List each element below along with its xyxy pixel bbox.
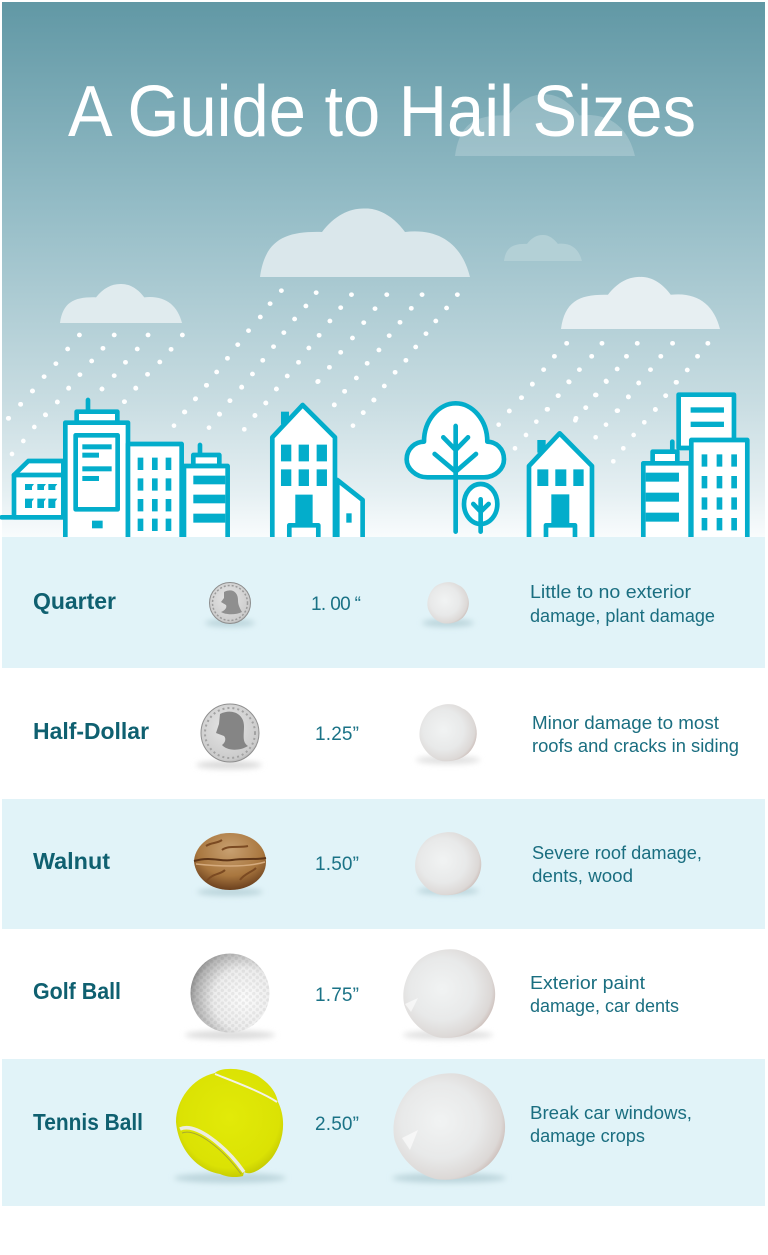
cloud: small far bbox=[504, 235, 582, 261]
icon: low office block bbox=[2, 461, 63, 517]
icon: walnut bbox=[194, 833, 266, 896]
label: Walnut: Walnut bbox=[33, 848, 110, 874]
value: 1.25 inch: 1.25” bbox=[315, 724, 359, 745]
cloud: faded behind title bbox=[455, 94, 635, 156]
label: Golf Ball: Golf Ball bbox=[33, 978, 121, 1004]
value: 2.50 inch: 2.50” bbox=[315, 1114, 359, 1135]
panel: row Walnut bbox=[2, 799, 765, 929]
description: walnut damage: dents, wood bbox=[532, 866, 633, 886]
illustration: left skyline bbox=[2, 400, 363, 543]
value: 1.50 inch: 1.50” bbox=[315, 854, 359, 875]
icon: walnut-size hailstone bbox=[415, 832, 481, 895]
hail dots: lower left field bbox=[6, 379, 376, 456]
hail dots: lower right field bbox=[496, 379, 678, 464]
description: golf ball damage bbox=[530, 973, 679, 1016]
icon: office cluster bbox=[643, 395, 747, 543]
value: 1.75 inch: 1.75” bbox=[315, 985, 359, 1006]
description: quarter damage bbox=[530, 582, 715, 626]
icon: golf-ball-size hailstone bbox=[403, 949, 495, 1040]
icon: townhouse with annex bbox=[272, 405, 363, 543]
panel: row Golf Ball bbox=[2, 929, 765, 1059]
description: quarter damage: damage, plant damage bbox=[530, 606, 715, 626]
icon: golf ball bbox=[185, 954, 275, 1040]
panel: row Half-Dollar bbox=[2, 668, 765, 799]
description: quarter damage: Little to no exterior bbox=[530, 582, 691, 602]
panel: sky background bbox=[2, 2, 765, 538]
icon: small tree bbox=[464, 484, 497, 532]
label: Tennis Ball: Tennis Ball bbox=[33, 1109, 143, 1135]
cloud: left bbox=[60, 284, 182, 323]
icon: half-dollar-size hailstone bbox=[416, 704, 480, 764]
description: golf ball damage: Exterior paint bbox=[530, 973, 645, 993]
description: walnut damage bbox=[532, 843, 702, 886]
description: half-dollar damage: Minor damage to most bbox=[532, 713, 719, 733]
description: golf ball damage: damage, car dents bbox=[530, 996, 679, 1016]
description: half-dollar damage bbox=[532, 713, 739, 756]
value: 1.00 inch: 1. 00 “ bbox=[311, 594, 361, 615]
icon: tall tower bbox=[65, 400, 128, 543]
icon: tennis-ball-size hailstone bbox=[392, 1073, 506, 1183]
label: Quarter: Quarter bbox=[33, 588, 116, 614]
icon: quarter-size hailstone bbox=[422, 582, 474, 627]
description: tennis ball damage bbox=[530, 1103, 692, 1146]
icon: quarter coin bbox=[205, 582, 255, 627]
cloud: large centre bbox=[260, 208, 470, 277]
description: tennis ball damage: damage crops bbox=[530, 1126, 645, 1146]
description: tennis ball damage: Break car windows, bbox=[530, 1103, 692, 1123]
title: A Guide to Hail Sizes bbox=[68, 72, 696, 152]
panel: row Tennis Ball bbox=[2, 1059, 765, 1206]
icon: small house bbox=[529, 433, 592, 543]
icon: tennis ball bbox=[174, 1069, 286, 1183]
icon: half-dollar coin bbox=[196, 704, 262, 769]
icon: striped building bbox=[184, 445, 228, 543]
description: half-dollar damage: roofs and cracks in siding bbox=[532, 736, 739, 756]
panel: row Quarter bbox=[2, 537, 765, 668]
illustration: right skyline bbox=[407, 395, 747, 543]
description: walnut damage: Severe roof damage, bbox=[532, 843, 702, 863]
icon: windowed building bbox=[128, 444, 182, 543]
hail dots: upper field bbox=[6, 288, 710, 421]
label: Half-Dollar: Half-Dollar bbox=[33, 718, 149, 744]
icon: large tree bbox=[407, 403, 504, 532]
cloud: right bbox=[561, 277, 720, 329]
